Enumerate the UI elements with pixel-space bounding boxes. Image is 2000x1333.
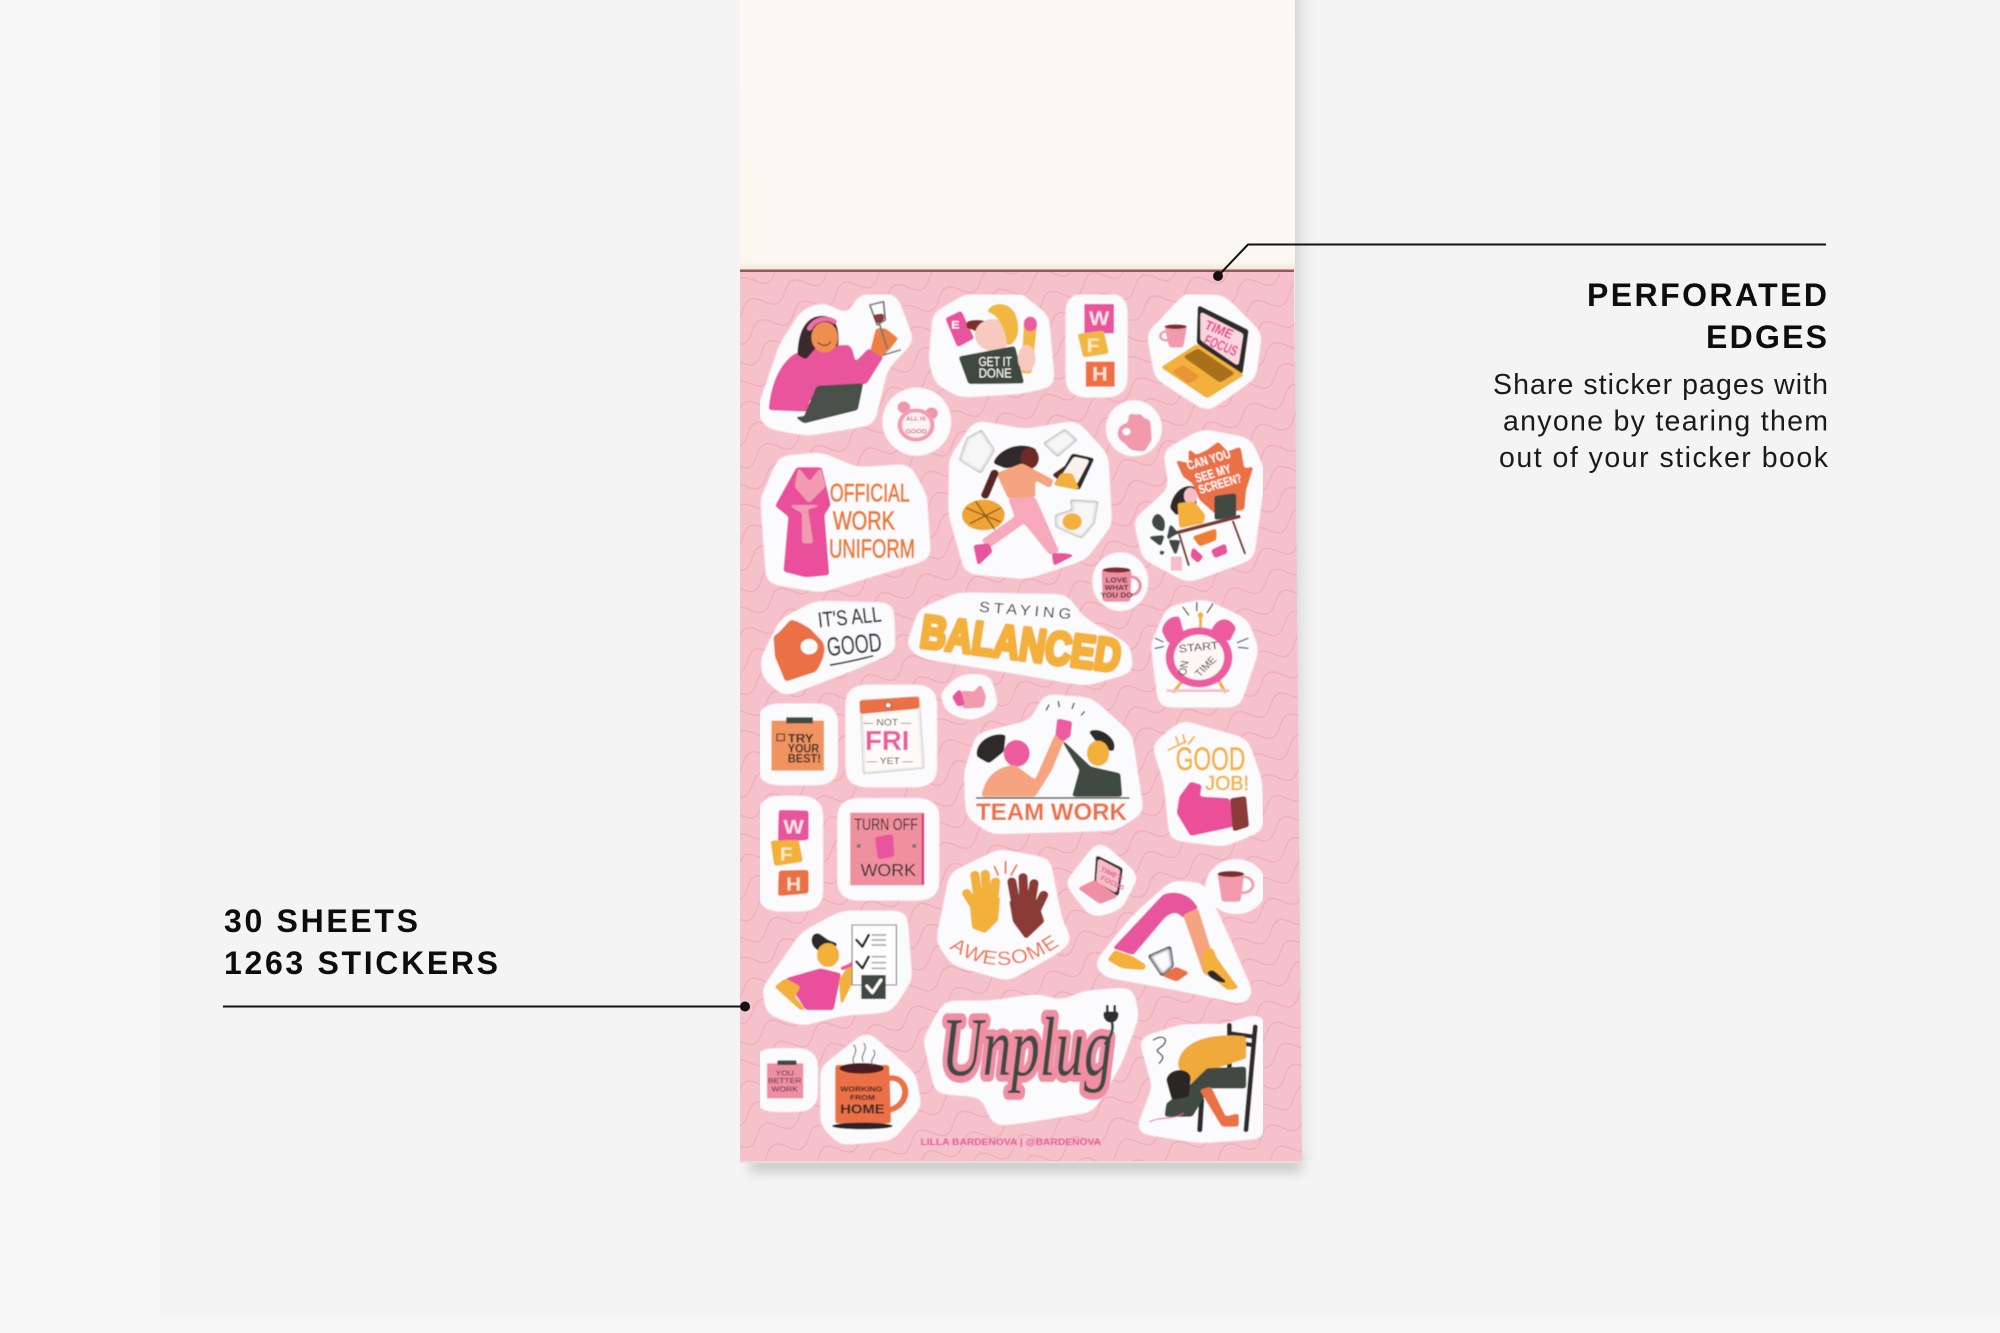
sticker: staying balanced: STAYING (978, 599, 1072, 623)
sticker: WFH blocks: H (1092, 365, 1108, 385)
sticker: small pink laptop: TIME'S (1099, 866, 1124, 883)
sticker: try your best note: BEST! (788, 752, 821, 765)
sticker: awesome hands: AWESOME (948, 934, 1060, 966)
sticker: start on time alarm clock: TIME (1193, 654, 1219, 679)
sticker: unplug lettering: Unplug (942, 1002, 1112, 1094)
heading: sheet and sticker counts: 30 SHEETS (224, 903, 418, 939)
sticker: turn off work switch (844, 804, 933, 895)
sticker: small pink mug (1209, 863, 1263, 911)
leader line and dot (223, 1002, 750, 1012)
sticker: small pink laptop (1072, 848, 1131, 912)
sticker: good job: JOB! (1205, 771, 1249, 795)
sticker: try your best note: YOUR (788, 742, 819, 755)
heading: perforated edges: PERFORATED (1587, 277, 1827, 313)
sticker: running woman with laptop (955, 427, 1105, 573)
sticker: can you see my screen: CAN YOU (1185, 447, 1233, 473)
sticker: you better work note: WORK (772, 1085, 799, 1093)
body text: out of your sticker book (1499, 442, 1829, 474)
sticker: team work high five: TEAM WORK (976, 799, 1128, 826)
sticker: try your best note: TRY (788, 732, 814, 745)
sticker: laptop time focus (1154, 297, 1255, 405)
heading: sheet and sticker counts (224, 903, 498, 981)
sticker: you better work note: YOU (776, 1069, 794, 1077)
body text: anyone by tearing them (1503, 406, 1828, 438)
sticker: get it done: GET IT (979, 355, 1012, 369)
sticker: official work uniform robe: UNIFORM (829, 534, 915, 563)
sticker: laptop time focus: FOCUS (1201, 333, 1240, 360)
sticker: WFH blocks small (764, 802, 817, 906)
sticker: team work high five (970, 700, 1137, 828)
sticker: laptop time focus: TIME (1202, 317, 1236, 342)
sticker: WFH blocks: F (1087, 336, 1100, 357)
sticker: working from home mug: HOME (840, 1101, 885, 1116)
leader line and dot (1213, 244, 1826, 281)
sticker: can you see my screen (1141, 435, 1259, 577)
sticker: not fri yet calendar: — YET — (867, 756, 913, 767)
sticker: good job (1159, 727, 1257, 841)
sticker: it's all good: IT'S ALL (817, 603, 883, 632)
panel: sticker book (740, 0, 1319, 1172)
sticker: burned out woman on chair (1144, 1020, 1263, 1137)
sticker: small thumbs up (946, 680, 992, 715)
sticker: official work uniform robe: WORK (833, 506, 895, 535)
sticker: not fri yet calendar: — NOT — (863, 718, 911, 728)
pink sticker sheet (740, 270, 1302, 1161)
sticker: working from home mug: WORKING (840, 1085, 882, 1094)
sticker: WFH blocks small: W (784, 817, 805, 838)
heading: perforated edges: EDGES (1706, 319, 1827, 355)
sticker: awesome hands (936, 850, 1070, 980)
sticker: checklist woman (769, 917, 906, 1020)
sticker: start on time alarm clock: START (1178, 640, 1219, 655)
sticker: small pink laptop: FOCUS (1099, 875, 1125, 892)
sticker: try your best note (764, 709, 831, 779)
sticker: you better work note: BETTER (768, 1076, 802, 1085)
heading: perforated edges (1587, 277, 1827, 355)
sticker: it's all good: GOOD (825, 627, 883, 662)
sticker: not fri yet calendar: FRI (865, 725, 909, 757)
sticker: WFH blocks (1072, 298, 1121, 392)
sticker: staying balanced (913, 598, 1127, 682)
sticker: unplug lettering (930, 993, 1132, 1120)
sticker: working from home mug: FROM (850, 1093, 875, 1102)
body text (1493, 369, 1829, 474)
callout: perforated edges (1213, 244, 1829, 474)
sticker: not fri yet calendar (852, 691, 930, 781)
sheet credit: LILLA BARDENOVA | @BARDENOVA (920, 1137, 1101, 1148)
sticker: WFH blocks: W (1089, 309, 1110, 330)
sticker: start on time alarm clock: ON (1176, 660, 1192, 676)
sticker: small alarm clock: ALL IS (906, 417, 926, 423)
sticker: you better work note (760, 1054, 811, 1106)
sticker: staying balanced: BALANCED (917, 606, 1125, 682)
sticker: downward dog yoga with laptop (1102, 887, 1246, 998)
sticker: woman with wine and laptop (763, 295, 907, 430)
sticker: official work uniform robe (767, 458, 924, 587)
sticker: turn off work switch: WORK (861, 860, 916, 880)
sticker: small alarm clock (886, 391, 947, 452)
sticker: start on time alarm clock (1155, 603, 1252, 702)
stickers (760, 294, 1263, 1148)
heading: sheet and sticker counts: 1263 STICKERS (224, 945, 498, 981)
sticker: small alarm clock: GOOD (905, 429, 927, 435)
callout: sheets and stickers (223, 903, 750, 1012)
sticker: working from home mug (827, 1038, 915, 1139)
sticker: pink ok hand (1110, 404, 1158, 453)
sticker: WFH blocks small: H (786, 875, 801, 895)
sticker: love what you do mug: WHAT (1105, 583, 1129, 592)
sticker: it's all good (767, 603, 889, 690)
sticker: good job: GOOD (1176, 742, 1245, 778)
sticker: love what you do mug: YOU DO (1101, 591, 1133, 599)
sticker: official work uniform robe: OFFICIAL (830, 479, 910, 507)
sticker: turn off work switch: TURN OFF (854, 815, 918, 834)
body text: Share sticker pages with (1493, 369, 1828, 401)
cream backing page (740, 0, 1295, 270)
sticker: WFH blocks small: F (780, 845, 793, 865)
sticker: get it done: E (951, 318, 960, 331)
sticker: love what you do mug: LOVE (1105, 576, 1128, 585)
sticker: get it done: DONE (979, 366, 1012, 380)
sticker: can you see my screen: SCREEN? (1197, 471, 1244, 497)
sticker: love what you do mug (1096, 556, 1144, 608)
sticker: can you see my screen: SEE MY (1193, 462, 1233, 485)
sticker: get it done (935, 295, 1048, 392)
